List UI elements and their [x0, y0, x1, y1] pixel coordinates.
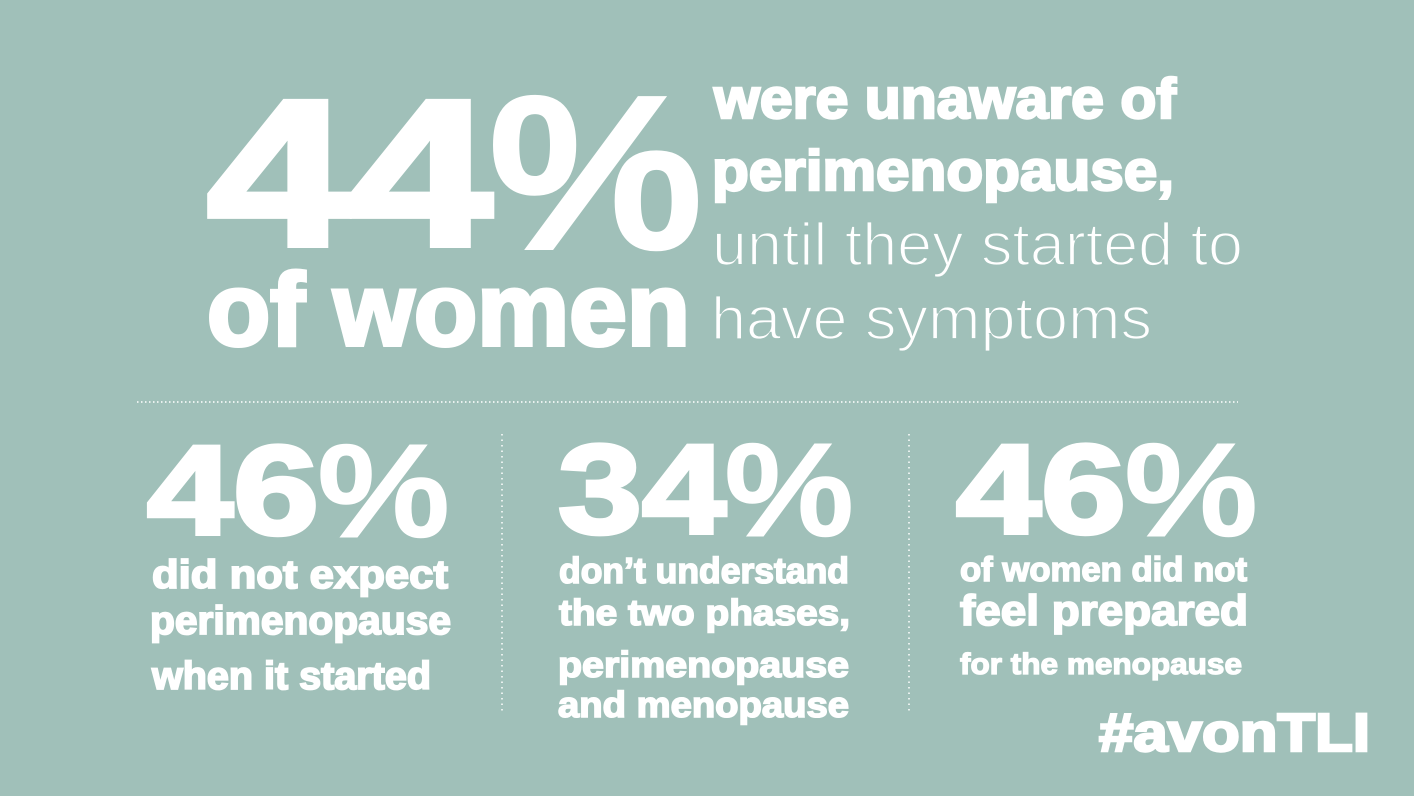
description: when it started [151, 655, 431, 698]
statistic 34%: % [725, 419, 853, 562]
headline subject: of women [207, 252, 690, 367]
description: feel prepared [960, 587, 1248, 635]
description [150, 553, 451, 698]
headline description [711, 67, 1243, 352]
description: for the menopause [960, 648, 1242, 681]
description: of women did not [960, 551, 1247, 589]
description: don’t understand [559, 550, 849, 591]
headline number: % [489, 54, 702, 291]
headline description: until they started to [712, 211, 1243, 278]
description: the two phases, [559, 592, 850, 633]
headline number [207, 54, 702, 291]
description [558, 550, 850, 725]
description: perimenopause [558, 644, 849, 685]
description [960, 551, 1248, 681]
headline description: were unaware of [713, 67, 1177, 131]
panel: did not expect perimenopause [147, 419, 451, 698]
description: and menopause [558, 684, 849, 725]
statistic 46%: % [1125, 419, 1257, 562]
statistic 46%: 46 [956, 418, 1126, 560]
description: perimenopause [150, 599, 451, 643]
statistic 34%: 34 [558, 418, 726, 560]
panel: headline statistic [207, 54, 1243, 367]
hashtag: #avonTLI [1099, 703, 1370, 763]
panel: did not feel prepared [956, 418, 1257, 681]
headline description: have symptoms [711, 285, 1152, 352]
description: did not expect [152, 553, 448, 597]
statistic 46% [147, 419, 449, 563]
statistic 46%: 46 [147, 419, 319, 561]
statistic 46%: % [318, 420, 449, 563]
headline description: perimenopause, [712, 139, 1174, 203]
headline number: 44 [207, 58, 492, 290]
panel: don't understand the two phases [558, 418, 853, 725]
statistic 34% [558, 418, 853, 562]
statistic 46% [956, 418, 1257, 562]
